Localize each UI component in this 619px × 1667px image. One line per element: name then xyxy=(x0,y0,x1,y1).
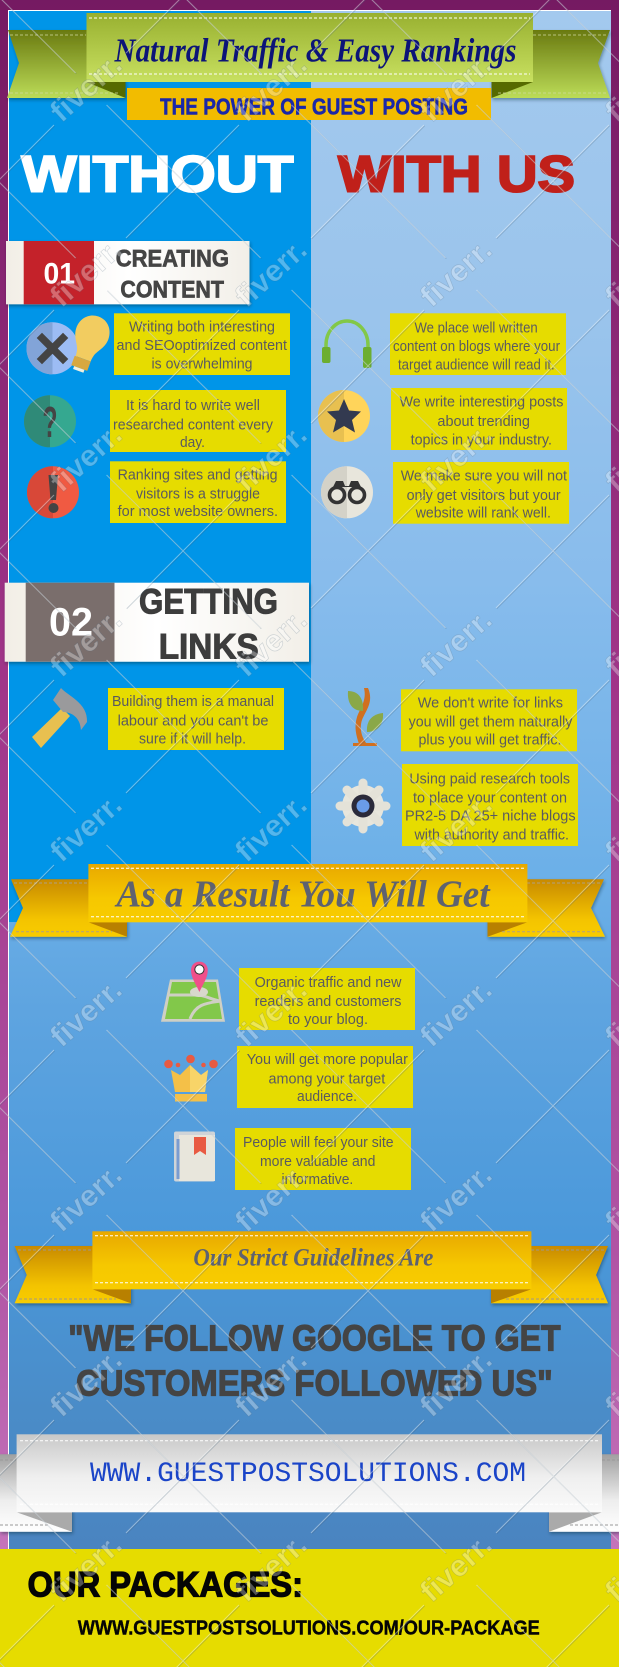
watermark words: fiverr. xyxy=(229,233,314,314)
text: visitors and rank: only get visitors but your xyxy=(407,487,561,504)
subtitle bar xyxy=(127,88,491,120)
heading: with us: WITH US xyxy=(338,146,575,202)
watermark words: fiverr. xyxy=(44,788,129,869)
text: ranking struggle: Ranking sites and getting xyxy=(118,466,278,483)
text: paid research tools: Using paid research tools xyxy=(409,770,570,787)
text: well written content: target audience will read it. xyxy=(398,356,555,373)
text: more popular xyxy=(237,1046,413,1108)
watermark words: fiverr. xyxy=(44,973,129,1054)
panel: packages xyxy=(0,1549,619,1667)
section badge 02: 02 xyxy=(49,601,93,645)
watermark words: fiverr. xyxy=(229,1343,314,1424)
watermark words: fiverr. xyxy=(229,1528,314,1609)
text: more popular: audience. xyxy=(297,1088,357,1105)
quote: "WE FOLLOW GOOGLE TO GET xyxy=(68,1318,561,1359)
text: manual labour: labour and you can't be xyxy=(118,712,268,729)
icon: headphones xyxy=(322,321,372,368)
text: ranking struggle: for most website owners. xyxy=(118,503,278,520)
packages heading: OUR PACKAGES: xyxy=(28,1566,303,1605)
watermark words: fiverr. xyxy=(414,1528,499,1609)
text: natural links: We don't write for links xyxy=(418,694,563,711)
icon: star xyxy=(318,390,370,442)
text: natural links: you will get them naturally xyxy=(409,714,573,731)
text: more popular: You will get more popular xyxy=(247,1051,408,1068)
watermark words: fiverr. xyxy=(229,418,314,499)
text: trending topics xyxy=(391,388,567,450)
text: trending topics: We write interesting posts xyxy=(400,394,563,411)
section badge 01: 01 xyxy=(44,257,75,290)
watermark words: fiverr. xyxy=(44,1343,129,1424)
title text: Natural Traffic & Easy Rankings xyxy=(114,33,516,70)
watermark words: fiverr. xyxy=(44,1528,129,1609)
text: paid research tools: with authority and traffic. xyxy=(414,826,569,843)
icon: gear xyxy=(340,783,386,829)
result heading: As a Result You Will Get xyxy=(115,874,491,916)
text: visitors and rank: We make sure you will not xyxy=(401,468,568,485)
title ribbon xyxy=(7,13,610,98)
watermark words: fiverr. xyxy=(229,1158,314,1239)
watermark words: fiverr. xyxy=(414,603,499,684)
text: natural links xyxy=(401,689,577,751)
text: hard to write: day. xyxy=(180,434,205,451)
section badge 01: CREATING xyxy=(116,246,229,273)
text: visitors and rank: website will rank well. xyxy=(415,505,551,522)
text: trending topics: about trending xyxy=(437,413,530,430)
watermark words: fiverr. xyxy=(44,418,129,499)
watermark words: fiverr. xyxy=(229,603,314,684)
icon: exclamation mark xyxy=(27,466,79,518)
icon: book xyxy=(174,1132,215,1182)
watermark words: fiverr. xyxy=(44,603,129,684)
section badge 01: CONTENT xyxy=(120,277,224,304)
watermark words: fiverr. xyxy=(229,48,314,129)
icon: binoculars xyxy=(321,466,373,518)
icon: plant xyxy=(348,688,383,746)
text: more popular: among your target xyxy=(268,1070,386,1087)
text: organic traffic: readers and customers xyxy=(255,993,402,1010)
text: writing content: is overwhelming xyxy=(152,355,252,372)
guidelines heading: Our Strict Guidelines Are xyxy=(193,1245,433,1272)
text: manual labour: sure if it will help. xyxy=(139,730,246,747)
watermark words: fiverr. xyxy=(414,48,499,129)
icon: question mark xyxy=(24,395,76,447)
text: writing content: Writing both interesting xyxy=(129,319,275,336)
text: hard to write: researched content every xyxy=(113,416,273,433)
subtitle bar: THE POWER OF GUEST POSTING xyxy=(160,93,468,119)
section badge 02: LINKS xyxy=(159,627,259,666)
icon: map with pin xyxy=(161,962,225,1022)
background: left column xyxy=(9,11,311,922)
text: well written content: content on blogs where your xyxy=(393,338,560,355)
packages url: WWW.GUESTPOSTSOLUTIONS.COM/OUR-PACKAGE xyxy=(78,1617,540,1639)
text: paid research tools: PR2-5 DA 25+ niche blogs xyxy=(405,808,576,825)
guidelines ribbon xyxy=(15,1231,608,1303)
watermark words: fiverr. xyxy=(229,973,314,1054)
text: visitors and rank xyxy=(393,462,569,524)
text: more valuable: more valuable and xyxy=(260,1153,375,1170)
watermark words: fiverr. xyxy=(44,48,129,129)
watermark words: fiverr. xyxy=(44,233,129,314)
icon: question mark: ? xyxy=(42,398,58,447)
text: more valuable: People will feel your site xyxy=(243,1134,394,1151)
text: hard to write: It is hard to write well xyxy=(126,397,260,414)
text: ranking struggle: visitors is a struggle xyxy=(136,485,260,502)
section badge 01 xyxy=(6,241,250,304)
text: natural links: plus you will get traffic. xyxy=(418,732,561,749)
text: organic traffic: Organic traffic and new xyxy=(255,974,402,991)
icon: hammer xyxy=(32,688,87,748)
text: organic traffic: to your blog. xyxy=(288,1011,368,1028)
text: ranking struggle xyxy=(110,461,286,523)
heading: without: WITHOUT xyxy=(22,146,294,202)
watermark words: fiverr. xyxy=(414,1158,499,1239)
watermark words: fiverr. xyxy=(44,1158,129,1239)
watermark words: fiverr. xyxy=(414,233,499,314)
watermark words: fiverr. xyxy=(414,1343,499,1424)
website url: WWW.GUESTPOSTSOLUTIONS.COM xyxy=(90,1459,526,1490)
watermark words: fiverr. xyxy=(229,788,314,869)
text: more valuable: informative. xyxy=(282,1171,353,1188)
section badge 02: GETTING xyxy=(139,582,278,621)
website ribbon xyxy=(0,1434,619,1532)
text: writing content: and SEOoptimized content xyxy=(116,337,288,354)
watermark words: fiverr. xyxy=(414,788,499,869)
text: trending topics: topics in your industry. xyxy=(411,431,552,448)
icon: cross and light bulb xyxy=(26,311,115,377)
text: well written content xyxy=(390,313,566,375)
text: paid research tools: to place your content on xyxy=(413,789,567,806)
text: manual labour xyxy=(108,688,284,750)
text: paid research tools xyxy=(402,764,578,846)
quote xyxy=(68,1318,561,1403)
section badge 02 xyxy=(5,582,309,666)
icon: crown xyxy=(164,1055,218,1102)
quote: CUSTOMERS FOLLOWED US" xyxy=(76,1362,553,1403)
watermark words: fiverr. xyxy=(414,418,499,499)
text: manual labour: Building them is a manual xyxy=(112,693,274,710)
result ribbon xyxy=(10,864,605,937)
text: writing content xyxy=(114,313,290,375)
watermark words: fiverr. xyxy=(414,973,499,1054)
text: well written content: We place well written xyxy=(414,319,538,336)
text: organic traffic xyxy=(239,968,415,1030)
text: hard to write xyxy=(110,390,286,452)
text: more valuable xyxy=(235,1128,411,1190)
